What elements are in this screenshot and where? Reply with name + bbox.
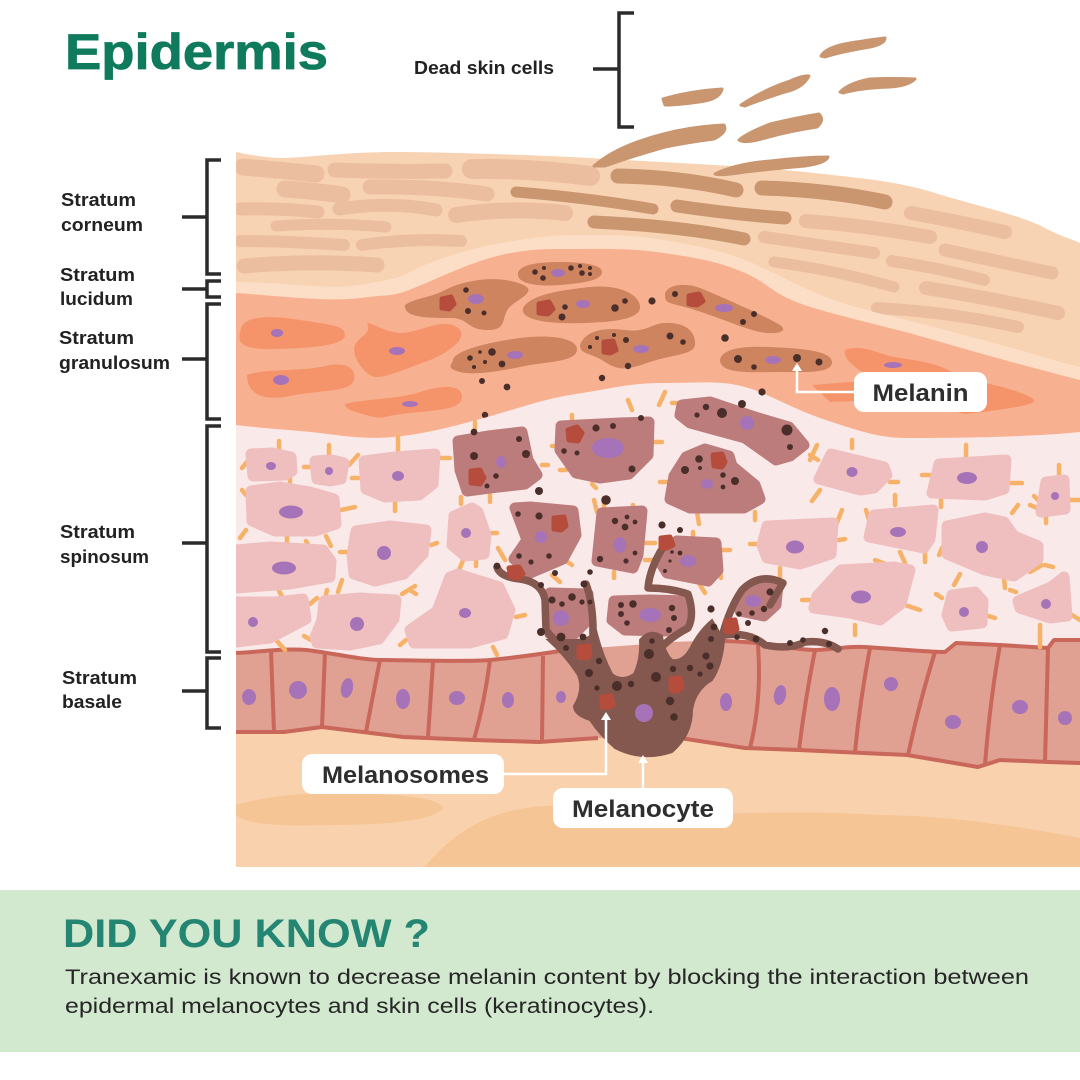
bracket label: stratum lucidum xyxy=(60,265,221,309)
basale nuclei xyxy=(242,677,1072,729)
dead skin flakes xyxy=(594,38,915,175)
melanin dots in granulosum xyxy=(463,264,822,418)
keratinocytes, pale xyxy=(236,453,1067,645)
melanin nuclei in granulosum xyxy=(271,269,902,407)
granulosum cells, orange xyxy=(239,317,1034,418)
leader: melanin xyxy=(792,363,854,392)
label: melanosomes xyxy=(302,754,504,794)
keratinocytes with melanin xyxy=(458,402,804,638)
bracket label: stratum lucidum: lucidum xyxy=(60,289,133,309)
bracket label: stratum basale: basale xyxy=(62,692,122,712)
heading: did you know: DID YOU KNOW ? xyxy=(63,912,430,956)
melanin dots xyxy=(470,388,832,721)
corneum cells, light xyxy=(240,167,1058,327)
bracket label: stratum corneum: Stratum xyxy=(61,190,136,210)
melanocyte xyxy=(497,540,838,756)
bracket label: stratum corneum: corneum xyxy=(61,215,143,235)
bracket label: stratum granulosum xyxy=(59,304,221,419)
bracket label: stratum lucidum: Stratum xyxy=(60,265,135,285)
layer: stratum corneum xyxy=(236,152,1080,367)
body text xyxy=(65,966,1029,1018)
layer: stratum granulosum xyxy=(236,248,1080,438)
title: Epidermis xyxy=(65,24,328,80)
leader: melanosomes xyxy=(504,712,611,774)
bracket label: stratum spinosum: Stratum xyxy=(60,522,135,542)
body text: epidermal melanocytes and skin cells (keratinocytes). xyxy=(65,995,654,1018)
body text: Tranexamic is known to decrease melanin content by blocking the interaction between xyxy=(65,966,1029,989)
bracket: dead skin cells xyxy=(414,13,634,127)
dermis background xyxy=(236,725,1080,867)
bracket label: stratum granulosum: granulosum xyxy=(59,353,170,373)
layer: stratum lucidum xyxy=(236,235,1080,380)
dermis shading xyxy=(236,793,1080,867)
bracket label: stratum corneum xyxy=(61,160,221,274)
leader: melanocyte xyxy=(638,755,648,788)
bracket label: stratum spinosum xyxy=(60,426,221,652)
bracket label: stratum basale: Stratum xyxy=(62,668,137,688)
label: melanin: Melanin xyxy=(872,380,968,407)
granulosum cells, brown xyxy=(405,262,832,373)
layer: stratum spinosum xyxy=(236,382,1080,659)
keratinocyte spines xyxy=(240,392,1080,655)
bracket label: stratum granulosum: Stratum xyxy=(59,328,134,348)
bracket label: stratum spinosum: spinosum xyxy=(60,547,149,567)
corneum cells, dark xyxy=(516,176,885,239)
melanosomes in granulosum xyxy=(442,294,703,353)
label: melanin xyxy=(854,372,987,412)
nuclei of melanin keratinocytes xyxy=(496,416,761,626)
panel: did you know xyxy=(0,890,1080,1052)
melanocyte nucleus xyxy=(635,704,653,722)
illustration: skin cross-section xyxy=(236,38,1080,867)
label: melanocyte: Melanocyte xyxy=(572,796,714,823)
bracket label: stratum basale xyxy=(62,658,221,728)
keratinocyte nuclei xyxy=(248,462,1059,631)
melanosomes xyxy=(471,427,737,707)
bracket: dead skin cells: Dead skin cells xyxy=(414,58,554,78)
label: melanosomes: Melanosomes xyxy=(322,762,489,789)
label: melanocyte xyxy=(553,788,733,828)
layer: stratum basale xyxy=(236,640,1080,767)
